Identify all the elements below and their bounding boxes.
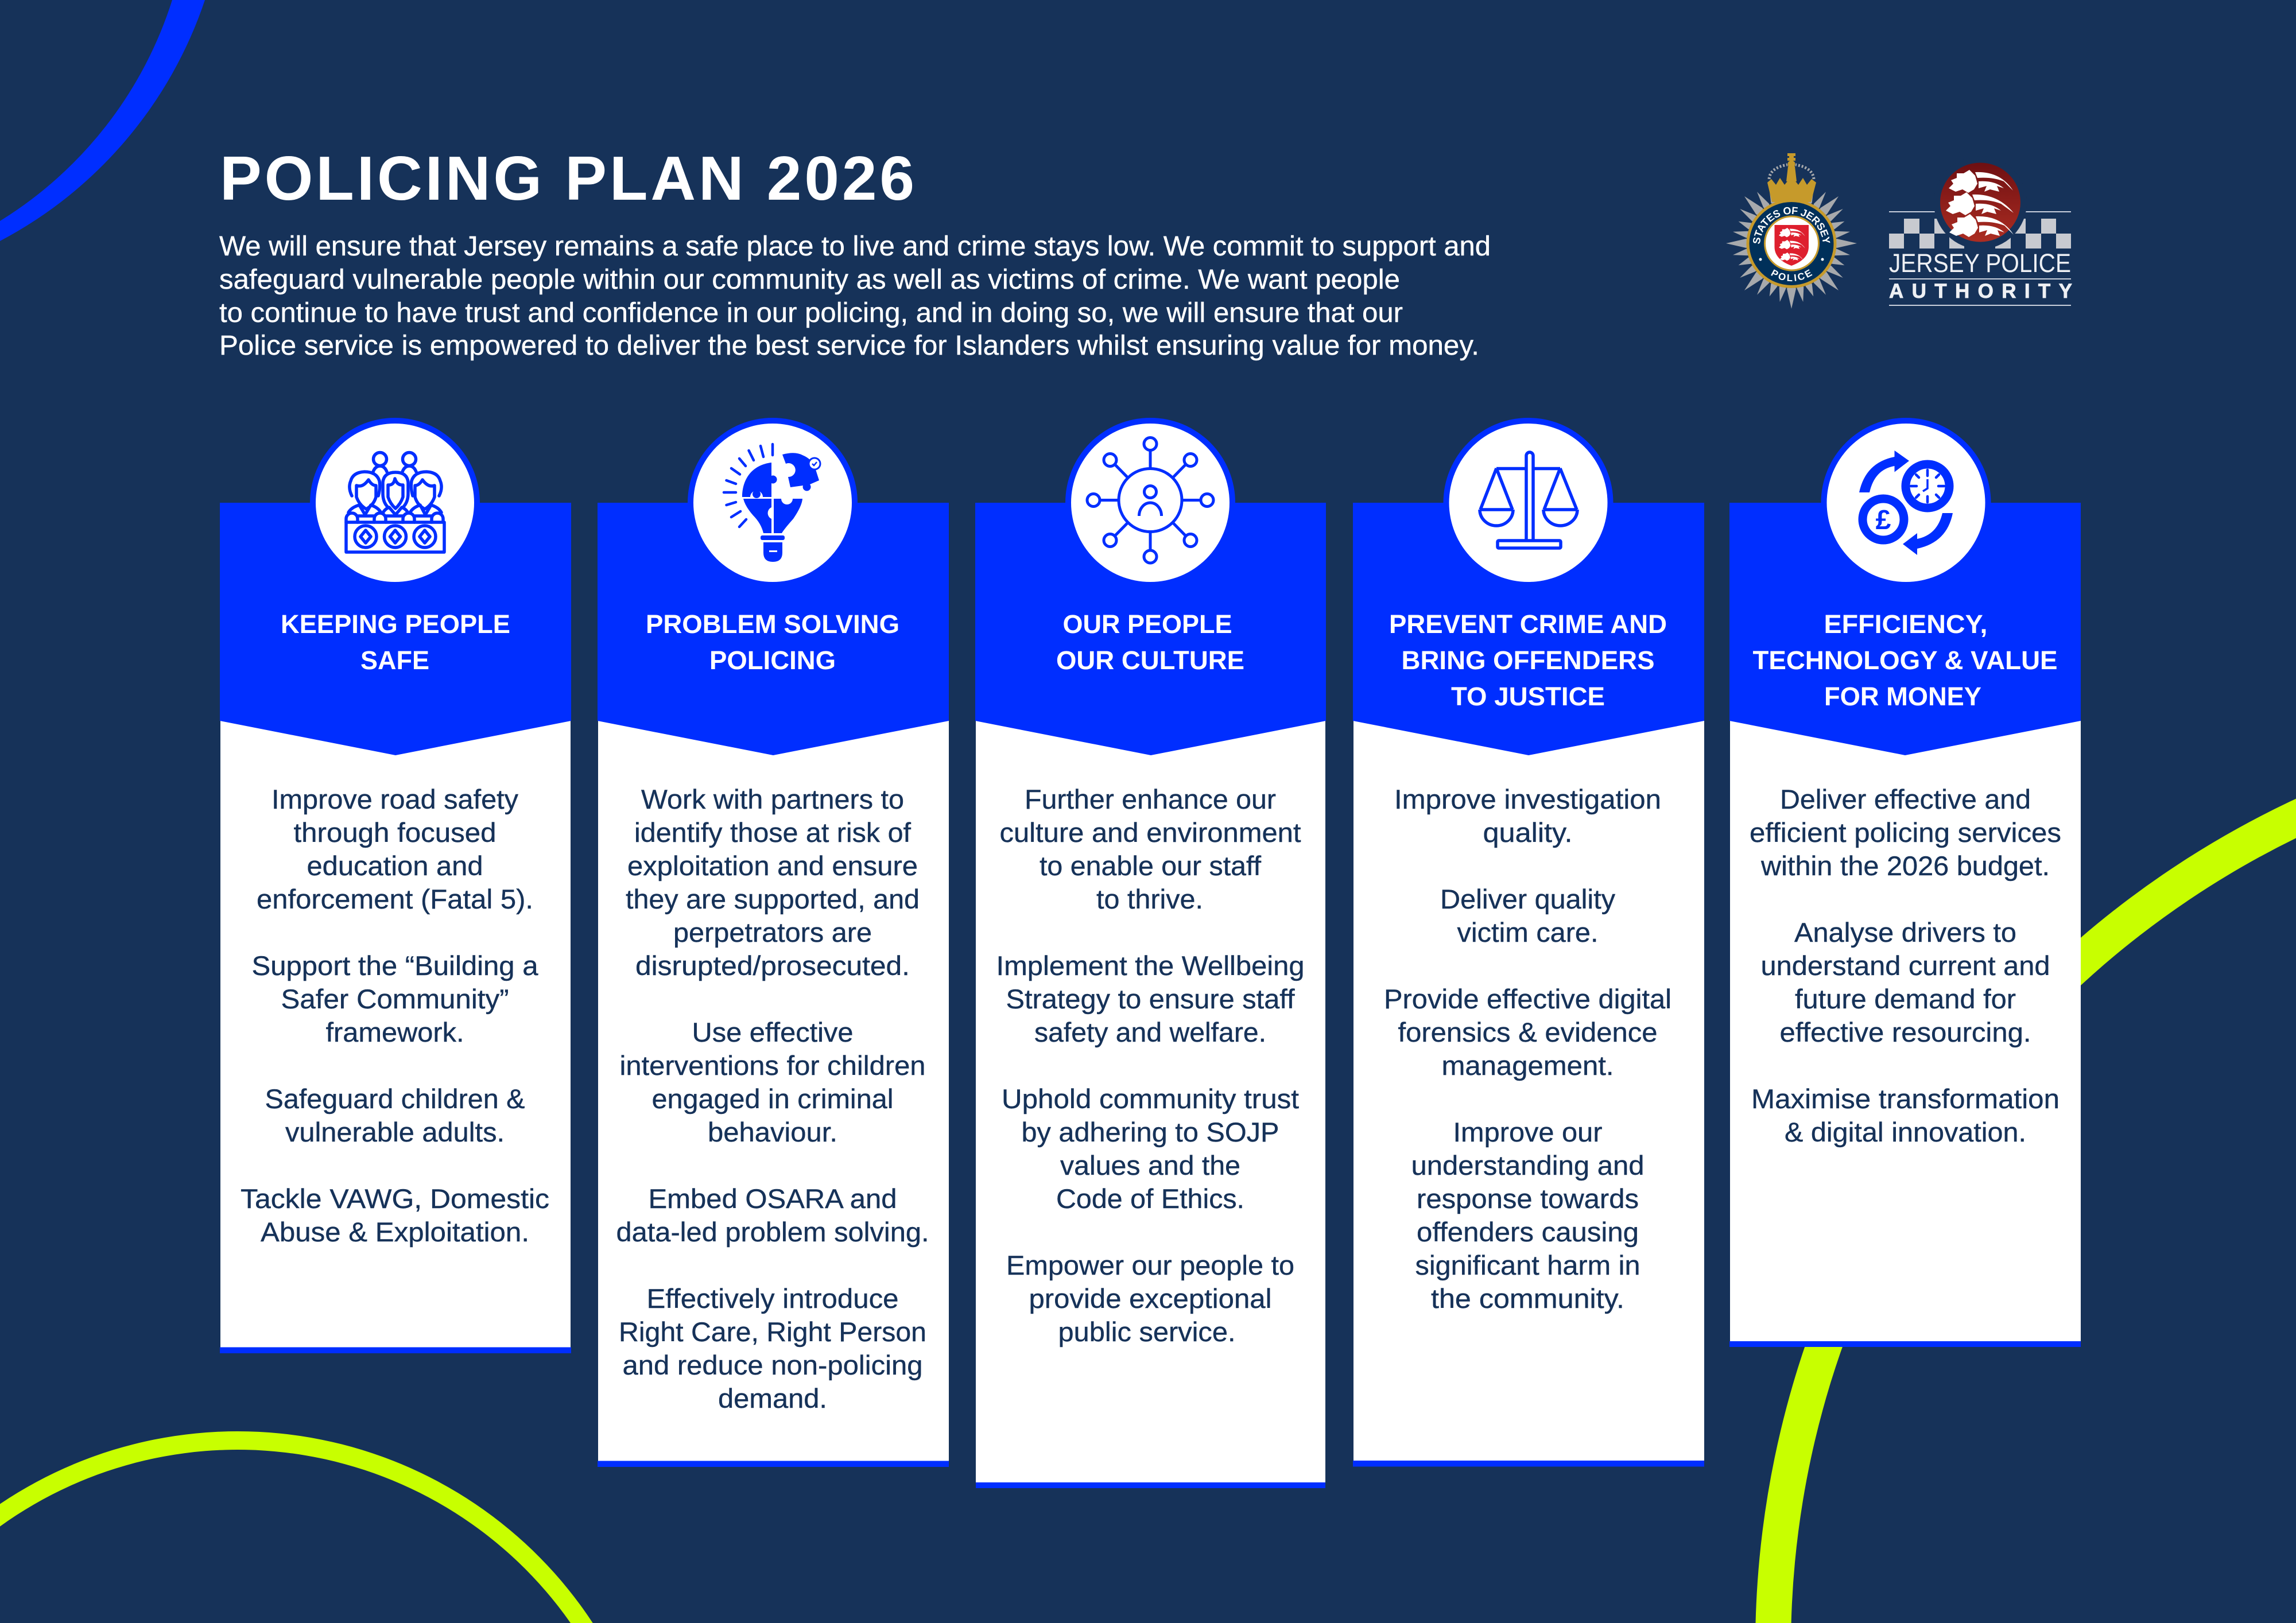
body text: through focused xyxy=(294,817,496,848)
body text: values and the xyxy=(1060,1150,1240,1181)
body text: identify those at risk of xyxy=(634,817,912,848)
body text: within the 2026 budget. xyxy=(1760,851,2050,881)
body text: Support the “Building a xyxy=(251,950,538,981)
panel: our people our culture xyxy=(975,418,1326,1488)
body text: demand. xyxy=(718,1383,827,1414)
body text: effective resourcing. xyxy=(1779,1017,2031,1047)
intro text: Police service is empowered to deliver the best service for Islanders whilst ensuring value for money. xyxy=(219,331,1479,361)
body text: to enable our staff xyxy=(1040,851,1262,881)
body text: Strategy to ensure staff xyxy=(1006,984,1295,1014)
body text: safety and welfare. xyxy=(1034,1017,1266,1047)
heading: OUR CULTURE xyxy=(1056,646,1244,675)
body text: Tackle VAWG, Domestic xyxy=(241,1183,549,1214)
body text: Provide effective digital xyxy=(1384,984,1671,1014)
body text: offenders causing xyxy=(1417,1217,1639,1247)
body text: Deliver effective and xyxy=(1780,784,2031,814)
body text: Code of Ethics. xyxy=(1056,1183,1244,1214)
body text: understand current and xyxy=(1761,950,2050,981)
body text: quality. xyxy=(1483,817,1573,848)
body text: public service. xyxy=(1058,1317,1235,1347)
heading: SAFE xyxy=(360,646,429,675)
heading: KEEPING PEOPLE xyxy=(281,609,510,639)
body text: Improve investigation xyxy=(1394,784,1661,814)
body text xyxy=(241,784,549,1247)
heading xyxy=(1056,609,1244,675)
intro text: safeguard vulnerable people within our community as well as victims of crime. We want people xyxy=(219,265,1400,295)
body text: Abuse & Exploitation. xyxy=(261,1217,529,1247)
icon: pound coin and clock cycle: £ xyxy=(1876,505,1891,535)
heading: TO JUSTICE xyxy=(1451,682,1605,711)
body text xyxy=(616,784,929,1414)
panel: prevent crime and bring offenders to justice xyxy=(1353,418,1704,1467)
body text: education and xyxy=(307,851,483,881)
decorative arc: lime right xyxy=(1755,799,2296,1623)
body text: Empower our people to xyxy=(1006,1250,1294,1280)
body text: engaged in criminal xyxy=(652,1084,893,1114)
heading xyxy=(281,609,510,675)
body text: behaviour. xyxy=(708,1117,837,1147)
icon: light bulb puzzle xyxy=(724,444,820,562)
body text: Improve road safety xyxy=(272,784,519,814)
body text: exploitation and ensure xyxy=(627,851,918,881)
body text xyxy=(1384,784,1671,1314)
panel: problem solving policing xyxy=(598,418,949,1467)
body text: perpetrators are xyxy=(673,917,872,948)
body text: to thrive. xyxy=(1096,884,1203,914)
title: POLICING PLAN 2026 xyxy=(220,143,914,213)
body text: Uphold community trust xyxy=(1002,1084,1299,1114)
logo: States of Jersey Police badge xyxy=(1726,153,1857,309)
heading: POLICING xyxy=(709,646,836,675)
body text: by adhering to SOJP xyxy=(1022,1117,1279,1147)
icon: pound coin and clock cycle xyxy=(1859,451,1953,555)
heading: PREVENT CRIME AND xyxy=(1389,609,1667,639)
body text: Analyse drivers to xyxy=(1794,917,2016,948)
body text: vulnerable adults. xyxy=(285,1117,505,1147)
heading: PROBLEM SOLVING xyxy=(646,609,899,639)
intro text: to continue to have trust and confidence in our policing, and in doing so, we will ensure that our xyxy=(219,298,1403,328)
body text: the community. xyxy=(1431,1283,1624,1314)
panel: efficiency, technology and value for money xyxy=(1729,418,2081,1347)
body text: & digital innovation. xyxy=(1785,1117,2026,1147)
decorative arc: lime bottom left xyxy=(0,1431,593,1623)
body text: provide exceptional xyxy=(1029,1283,1272,1314)
body text: efficient policing services xyxy=(1750,817,2061,848)
body text: response towards xyxy=(1417,1183,1639,1214)
panel: keeping people safe xyxy=(220,418,571,1353)
body text: Embed OSARA and xyxy=(649,1183,897,1214)
heading xyxy=(1753,609,2057,711)
heading: FOR MONEY xyxy=(1824,682,1981,711)
body text xyxy=(1750,784,2061,1147)
intro text xyxy=(219,231,1491,361)
body text: management. xyxy=(1442,1050,1614,1081)
logo: Jersey Police Authority xyxy=(1889,156,2072,306)
body text: Implement the Wellbeing xyxy=(996,950,1304,981)
icon: scales of justice xyxy=(1480,452,1577,548)
decorative arc: blue top left xyxy=(0,0,205,241)
body text: and reduce non-policing xyxy=(622,1350,923,1380)
body text: Safeguard children & xyxy=(265,1084,525,1114)
body text: forensics & evidence xyxy=(1398,1017,1658,1047)
body text: they are supported, and xyxy=(626,884,920,914)
heading xyxy=(1389,609,1667,711)
body text: interventions for children xyxy=(620,1050,925,1081)
logo: Jersey Police Authority: AUTHORITY xyxy=(1889,280,2072,302)
body text: victim care. xyxy=(1457,917,1598,948)
logo: States of Jersey Police badge: STATES OF JERSEY xyxy=(1753,207,1830,244)
body text: Improve our xyxy=(1453,1117,1603,1147)
body text: Use effective xyxy=(692,1017,853,1047)
body text: culture and environment xyxy=(1000,817,1301,848)
intro text: We will ensure that Jersey remains a safe place to live and crime stays low. We commit to support and xyxy=(219,231,1491,262)
body text: future demand for xyxy=(1795,984,2016,1014)
heading: EFFICIENCY, xyxy=(1824,609,1987,639)
body text: disrupted/prosecuted. xyxy=(635,950,910,981)
body text: Maximise transformation xyxy=(1751,1084,2060,1114)
body text: significant harm in xyxy=(1415,1250,1640,1280)
heading xyxy=(646,609,899,675)
icon: person network xyxy=(1087,437,1213,563)
heading: BRING OFFENDERS xyxy=(1402,646,1654,675)
body text: Effectively introduce xyxy=(646,1283,899,1314)
heading: OUR PEOPLE xyxy=(1063,609,1232,639)
body text: Right Care, Right Person xyxy=(619,1317,926,1347)
body text: data-led problem solving. xyxy=(616,1217,929,1247)
body text: framework. xyxy=(326,1017,464,1047)
body text: enforcement (Fatal 5). xyxy=(257,884,533,914)
body text: Further enhance our xyxy=(1025,784,1276,814)
heading: TECHNOLOGY & VALUE xyxy=(1753,646,2057,675)
logo: States of Jersey Police badge: POLICE xyxy=(1771,269,1813,281)
logo: Jersey Police Authority: JERSEY POLICE xyxy=(1889,249,2071,278)
icon: people at a table xyxy=(346,452,444,552)
body text xyxy=(996,784,1304,1347)
body text: Safer Community” xyxy=(281,984,509,1014)
body text: understanding and xyxy=(1411,1150,1644,1181)
body text: Deliver quality xyxy=(1440,884,1616,914)
body text: Work with partners to xyxy=(641,784,904,814)
